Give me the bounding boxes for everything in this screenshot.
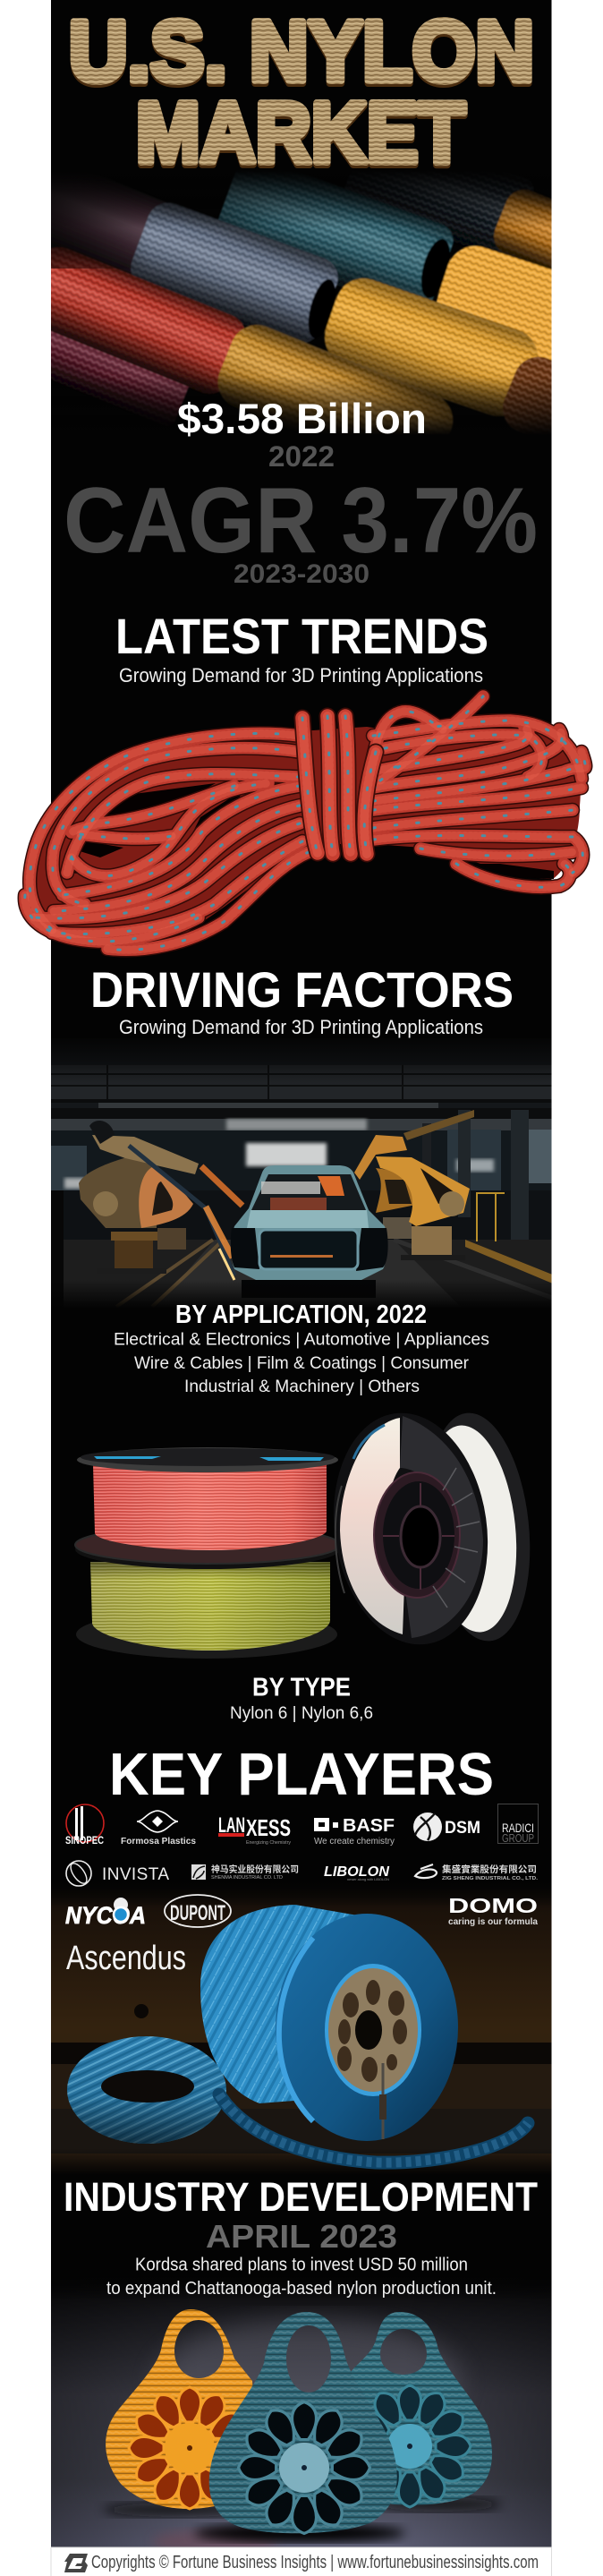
development text: to expand Chattanooga-based nylon production unit. bbox=[106, 2278, 497, 2299]
logo: DuPont: DUPONT bbox=[170, 1901, 225, 1925]
title bbox=[69, 4, 534, 183]
logo: Nycoa: NYCOA bbox=[65, 1902, 146, 1929]
footer bbox=[51, 2547, 551, 2576]
application list bbox=[114, 1330, 489, 1396]
heading: by application: BY APPLICATION, 2022 bbox=[175, 1301, 427, 1329]
robot arm right bbox=[354, 1135, 470, 1260]
logo: Libolon: newer along with LIBOLON bbox=[347, 1878, 390, 1881]
logo: Domo bbox=[448, 1894, 538, 1927]
logo: Shenma: SHENMA INDUSTRIAL CO. LTD bbox=[211, 1875, 283, 1881]
logo: BASF: BASF bbox=[343, 1816, 395, 1836]
title face bbox=[69, 4, 534, 181]
heading: latest trends: LATEST TRENDS bbox=[115, 608, 488, 664]
logo: Ascendus: Ascendus bbox=[66, 1940, 186, 1977]
application list: Industrial & Machinery | Others bbox=[184, 1377, 420, 1396]
heading: by type: BY TYPE bbox=[252, 1674, 351, 1702]
bag: orange bbox=[106, 2309, 252, 2509]
company logos bbox=[65, 1804, 539, 1977]
latest trends text: Growing Demand for 3D Printing Applications bbox=[119, 664, 483, 687]
logo: BASF bbox=[314, 1816, 395, 1847]
market value: $3.58 Billion bbox=[177, 395, 427, 442]
reel flange bbox=[276, 1914, 458, 2141]
logo: DSM bbox=[413, 1813, 480, 1841]
logo: Zig Sheng: 集盛實業股份有限公司 bbox=[442, 1864, 537, 1875]
image: car factory with robot arms bbox=[51, 1034, 555, 1313]
logo: Zig Sheng: ZIG SHENG INDUSTRIAL CO., LTD. bbox=[442, 1876, 539, 1881]
heading: key players: KEY PLAYERS bbox=[109, 1741, 494, 1808]
logo: BASF: We create chemistry bbox=[314, 1837, 395, 1847]
reel coil bbox=[200, 1905, 354, 2103]
logo: Radici Group: GROUP bbox=[502, 1831, 534, 1845]
logo: Libolon: LIBOLON bbox=[324, 1864, 390, 1880]
development text: Kordsa shared plans to invest USD 50 million bbox=[135, 2254, 468, 2275]
robot arm left bbox=[79, 1121, 242, 1280]
image: red rope coil bbox=[25, 696, 585, 950]
logo: Zig Sheng bbox=[415, 1864, 539, 1881]
logo: Radici Group: RADICI bbox=[502, 1821, 534, 1835]
title shadow: U.S. NYLON bbox=[69, 6, 534, 102]
base year: 2022 bbox=[268, 440, 335, 473]
logo: Domo: DOMO bbox=[448, 1894, 538, 1917]
factory column bbox=[511, 1110, 529, 1240]
lime filament spool bbox=[90, 1562, 330, 1651]
logo: Lanxess bbox=[218, 1813, 292, 1846]
logo: Sinopec bbox=[65, 1804, 104, 1847]
title face: U.S. NYLON bbox=[69, 4, 534, 99]
logo: Invista bbox=[66, 1861, 169, 1886]
heading: driving factors: DRIVING FACTORS bbox=[90, 961, 514, 1018]
bag: front teal bbox=[209, 2312, 397, 2533]
title shadow bbox=[69, 6, 534, 183]
driving factors text: Growing Demand for 3D Printing Applications bbox=[119, 1016, 483, 1038]
coral filament spool bbox=[93, 1464, 327, 1550]
heading: industry development: INDUSTRY DEVELOPMENT bbox=[64, 2174, 538, 2220]
image: crochet bags bbox=[51, 2273, 552, 2555]
logo: Sinopec: SINOPEC bbox=[65, 1834, 104, 1847]
logo: Lanxess: XESS bbox=[246, 1814, 291, 1841]
logo: Shenma: 神马实业股份有限公司 bbox=[211, 1864, 299, 1875]
logo: Lanxess: Energizing Chemistry bbox=[246, 1840, 292, 1846]
logo: Domo: caring is our formula bbox=[448, 1916, 538, 1927]
image: filament spools bbox=[75, 1403, 540, 1659]
logo: Shenma bbox=[191, 1864, 299, 1881]
rope loop on floor bbox=[67, 2036, 528, 2162]
image: nylon thread spools bbox=[51, 174, 551, 433]
white filament spool bbox=[319, 1403, 540, 1655]
application list: Electrical & Electronics | Automotive | Appliances bbox=[114, 1330, 489, 1350]
logo: Formosa Plastics: Formosa Plastics bbox=[121, 1837, 196, 1847]
title face: MARKET bbox=[136, 85, 465, 181]
forecast period: 2023-2030 bbox=[234, 559, 369, 589]
logo: Invista: INVISTA bbox=[102, 1865, 169, 1884]
icon: Fortune Business Insights mark bbox=[64, 2554, 88, 2572]
logo: Lanxess: LAN bbox=[218, 1813, 245, 1838]
development text bbox=[106, 2254, 497, 2299]
type list: Nylon 6 | Nylon 6,6 bbox=[230, 1703, 373, 1723]
logo: Formosa Plastics bbox=[121, 1811, 196, 1847]
car body bbox=[231, 1165, 388, 1298]
logo: Radici Group bbox=[497, 1804, 539, 1845]
logo: DuPont bbox=[165, 1895, 231, 1927]
development date: APRIL 2023 bbox=[206, 2218, 397, 2255]
logo: DSM: DSM bbox=[445, 1819, 480, 1838]
bag: back teal bbox=[349, 2312, 492, 2507]
application list: Wire & Cables | Film & Coatings | Consumer bbox=[134, 1353, 469, 1373]
reel hub bbox=[325, 1964, 421, 2139]
title shadow: MARKET bbox=[136, 88, 465, 183]
image: blue rope reel bbox=[51, 1880, 552, 2175]
CAGR figure: CAGR 3.7% bbox=[64, 469, 538, 573]
